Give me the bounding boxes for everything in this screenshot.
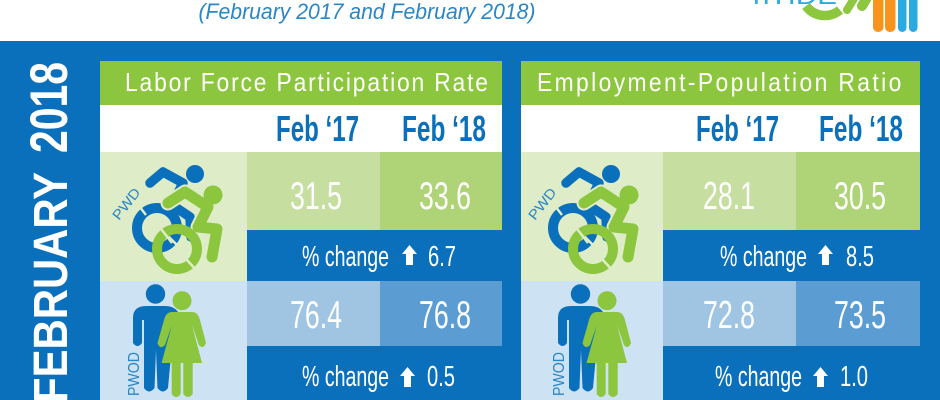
percent change: PWOD: % change [302,361,389,393]
value: PWD Feb 17 [247,152,380,230]
column headers: Feb ‘18 [402,108,486,149]
value: PWD Feb 18 [796,152,920,230]
panel heading: Labor Force Participation Rate [125,69,488,97]
percent change: PWD: 6.7 [428,241,456,273]
percent change: PWOD: 1.0 [840,361,868,393]
value: PWOD Feb 18: 73.5 [834,294,886,337]
row: PWOD icon cell [521,281,663,400]
icon: man and woman [133,284,206,397]
panel: employment-population ratio [521,61,920,400]
percent change: PWD: 8.5 [846,241,874,273]
panel heading [100,61,502,105]
column headers: Feb ‘18 [819,108,903,149]
value: PWD Feb 17 [663,152,796,230]
value: PWOD Feb 17: 72.8 [703,294,755,337]
value: PWD Feb 18: 33.6 [419,175,471,218]
percent change: PWD: % change [720,241,807,273]
column headers: Feb ‘17 [696,108,779,149]
value: PWOD Feb 17: 76.4 [290,294,342,337]
value: PWD Feb 17: 31.5 [290,175,342,218]
logo [753,0,918,32]
value: PWOD Feb 18 [380,281,502,346]
column headers [100,105,502,152]
value: PWOD Feb 17 [663,281,796,346]
row: PWD icon cell [100,152,247,281]
label: PWD: PWD [109,185,144,223]
vertical date label: FEBRUARY [25,172,78,400]
row: PWOD icon cell [100,281,247,400]
percent change: PWOD: 0.5 [427,361,455,393]
label: PWOD: PWOD [126,352,143,396]
label: PWOD: PWOD [551,352,568,396]
panel heading [521,61,920,105]
column headers [521,105,920,152]
value: PWD Feb 18 [380,152,502,230]
percent change: PWOD: % change [715,361,802,393]
label: PWD: PWD [525,185,560,223]
icon: wheelchair users [552,165,638,272]
value: PWD Feb 17: 28.1 [703,175,755,218]
value: PWOD Feb 18: 76.8 [419,294,471,337]
percent change: PWD: % change [302,241,389,273]
panel heading: Employment-Population Ratio [537,69,901,97]
panel: labor force participation rate [100,61,502,400]
vertical date label: 2018 [20,62,79,153]
value: PWD Feb 18: 30.5 [834,175,886,218]
icon: man and woman [558,284,631,397]
row: PWD icon cell [521,152,663,281]
icon: wheelchair users [136,165,222,272]
value: PWOD Feb 18 [796,281,920,346]
vertical date label [20,62,79,400]
column headers: Feb ‘17 [276,108,359,149]
value: PWOD Feb 17 [247,281,380,346]
